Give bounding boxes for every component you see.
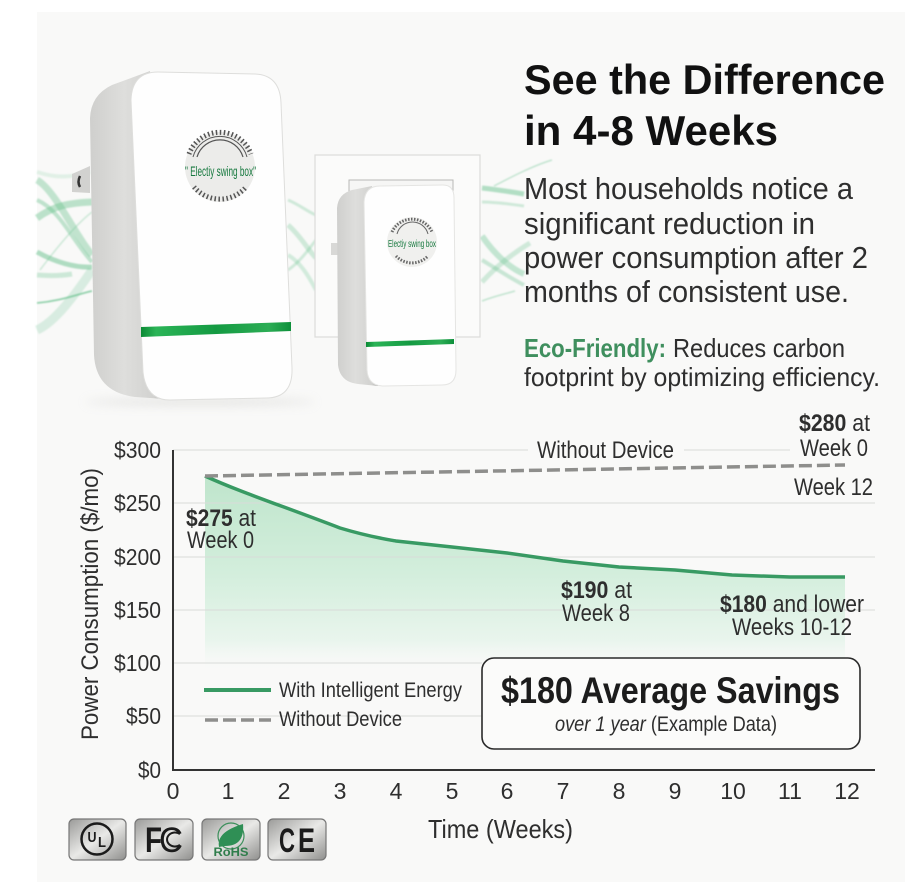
y axis title: Power Consumption ($/mo) xyxy=(77,468,104,740)
small device xyxy=(331,185,456,386)
y axis tick labels: $100 xyxy=(114,650,161,676)
x axis tick labels: 5 xyxy=(446,778,458,804)
y axis tick labels xyxy=(114,437,161,783)
badge: UL xyxy=(69,819,126,860)
callout: $190 at week 8 xyxy=(561,577,632,627)
savings callout box: over 1 year (Example Data) xyxy=(555,713,777,736)
area under savings curve xyxy=(205,476,845,670)
y axis tick labels: $0 xyxy=(138,757,161,783)
description paragraph xyxy=(524,171,868,309)
callout: $275 at week 0: Week 0 xyxy=(187,527,254,554)
green energy waves, middle xyxy=(288,200,316,290)
callout: $180 and lower: Weeks 10-12 xyxy=(732,614,852,641)
callout: $280 at week 0 xyxy=(799,410,870,462)
callout: $275 at week 0: $275 at xyxy=(186,505,256,532)
x axis tick labels: 11 xyxy=(778,778,802,804)
large device xyxy=(72,71,292,400)
badge: RoHS xyxy=(202,819,260,860)
callout: $280 at week 0: $280 at xyxy=(799,410,870,437)
y axis tick labels: $150 xyxy=(114,597,161,623)
green energy waves, left xyxy=(37,172,92,330)
legend: Without Device xyxy=(279,708,402,731)
callout: $275 at week 0 xyxy=(186,505,256,554)
description paragraph: months of consistent use. xyxy=(524,274,849,309)
callout: $280 at week 0: Week 0 xyxy=(800,435,868,462)
x axis tick labels: 4 xyxy=(390,778,403,804)
x axis tick labels: 1 xyxy=(222,778,234,804)
badge: FC xyxy=(135,819,193,860)
with device line xyxy=(205,476,845,577)
x axis tick labels xyxy=(167,778,860,804)
x axis title: Time (Weeks) xyxy=(428,814,573,844)
x axis tick labels: 6 xyxy=(501,778,513,804)
device shadow xyxy=(85,399,315,405)
badge: UL: U xyxy=(88,829,96,846)
small device side xyxy=(337,186,378,386)
wall plate xyxy=(315,155,480,337)
eco-friendly note: footprint by optimizing efficiency. xyxy=(524,362,880,392)
green energy waves, right xyxy=(482,160,552,301)
description paragraph: significant reduction in xyxy=(524,206,815,241)
label sticker xyxy=(185,132,256,202)
small label sticker: Electiy swing box xyxy=(388,239,436,250)
line chart xyxy=(77,410,875,844)
x axis tick labels: 7 xyxy=(557,778,569,804)
without device label: Without Device xyxy=(537,437,674,464)
x axis tick labels: 9 xyxy=(669,778,681,804)
certification badges xyxy=(69,819,326,860)
badge: CE: C xyxy=(279,822,295,860)
device face xyxy=(131,72,292,400)
gridlines xyxy=(173,450,875,716)
plug prongs xyxy=(72,166,90,193)
callout: $190 at week 8: $190 at xyxy=(561,577,632,604)
heading xyxy=(524,56,885,154)
callout: $180 and lower: $180 and lower xyxy=(720,591,864,618)
axes xyxy=(173,450,875,770)
y axis tick labels: $200 xyxy=(114,544,161,570)
description paragraph: Most households notice a xyxy=(524,171,854,206)
callout: week 12: Week 12 xyxy=(794,474,873,501)
badge: RoHS: RoHS xyxy=(214,845,248,859)
x axis tick labels: 0 xyxy=(167,778,179,804)
device side xyxy=(90,71,165,399)
eco-friendly note xyxy=(524,333,880,392)
x axis tick labels: 12 xyxy=(834,778,860,804)
eco-friendly note: Reduces carbon xyxy=(673,333,845,363)
x axis tick labels: 3 xyxy=(334,778,346,804)
description paragraph: power consumption after 2 xyxy=(524,240,868,275)
y axis tick labels: $50 xyxy=(126,703,161,729)
eco-friendly note: Eco-Friendly: xyxy=(524,333,666,363)
x axis tick labels: 8 xyxy=(613,778,625,804)
small device face xyxy=(364,185,456,386)
heading: See the Difference xyxy=(524,56,885,103)
savings callout box xyxy=(482,658,860,749)
badge: FC: F xyxy=(145,821,162,860)
y axis tick labels: $250 xyxy=(114,490,161,516)
badge: CE xyxy=(268,819,326,860)
label sticker: " Electiy swing box" xyxy=(185,163,256,179)
without device dashed line xyxy=(205,465,845,476)
heading: in 4-8 Weeks xyxy=(524,107,778,154)
small green strip xyxy=(366,339,454,347)
badge: CE: E xyxy=(298,822,315,860)
x axis tick labels: 10 xyxy=(720,778,746,804)
badge: UL: L xyxy=(98,834,106,851)
small label sticker xyxy=(387,217,437,267)
small plug xyxy=(331,243,338,255)
callout: $180 and lower xyxy=(720,591,864,641)
green indicator strip xyxy=(141,322,291,337)
badge: FC: C xyxy=(159,821,183,860)
y axis tick labels: $300 xyxy=(114,437,161,463)
x axis tick labels: 2 xyxy=(278,778,290,804)
legend: With Intelligent Energy xyxy=(279,679,462,702)
savings callout box: $180 Average Savings xyxy=(501,670,840,711)
callout: $190 at week 8: Week 8 xyxy=(562,600,630,627)
legend xyxy=(204,679,462,731)
